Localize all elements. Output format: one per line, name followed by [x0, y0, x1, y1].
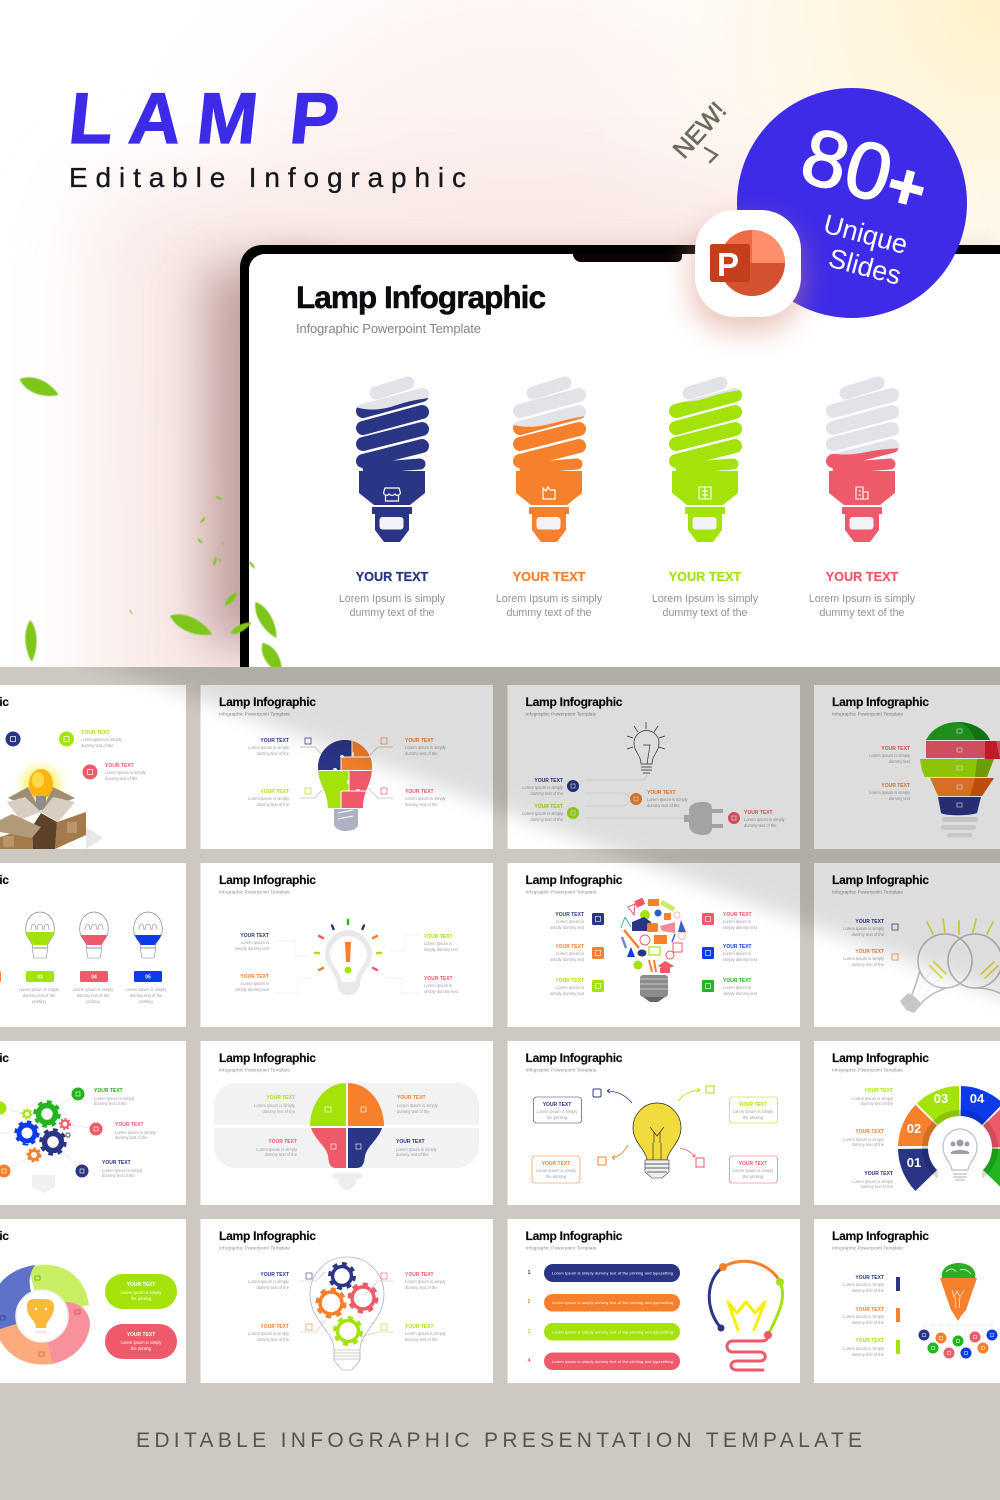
bulb 2 text: YOUR TEXT: [513, 570, 585, 584]
bulb 2: orange: [516, 383, 582, 542]
text block orange: Lorem Ipsum is simply: [843, 1314, 885, 1319]
text block red: Lorem Ipsum is simply: [744, 817, 786, 822]
text block red: YOUR TEXT: [744, 810, 773, 816]
text block orange: dummy text of the: [256, 1337, 290, 1342]
text block lime: YOUR TEXT: [405, 1324, 434, 1330]
icon circles: [0, 1088, 102, 1178]
connectors: [275, 935, 420, 993]
text block navy: Lorem Ipsum is simply: [843, 1282, 885, 1287]
text block lime: YOUR TEXT: [81, 730, 110, 736]
text block red: simply dummy text: [424, 989, 459, 994]
falling green leaves: [17, 372, 287, 677]
chart: sliced bulb: [920, 722, 1000, 838]
text block orange: Lorem Ipsum is simply: [869, 790, 911, 795]
text block orange: Lorem Ipsum is simply: [405, 745, 447, 750]
text block lime: Lorem Ipsum is simply: [852, 1096, 894, 1101]
text block red: Lorem Ipsum is simply: [405, 796, 447, 801]
slide r3c3: sketched yellow bulb: [508, 1041, 800, 1205]
text block orange: Lorem Ipsum is simply: [647, 797, 689, 802]
badge: 80+ Unique Slides: 80+: [793, 110, 938, 229]
text block orange: dummy text of the: [647, 803, 680, 808]
text block lime: simply dummy text: [424, 947, 459, 952]
text block lime: Lorem Ipsum is simply: [522, 811, 564, 816]
bulb 2 text: Lorem Ipsum is simply: [496, 593, 603, 605]
bulb 2 text: dummy text of the: [507, 607, 592, 619]
icon cluster: [918, 1325, 998, 1358]
row 3: Lorem Ipsum is simply dummy text of the printing and typesetting: [552, 1330, 673, 1334]
text block red: YOUR TEXT: [424, 976, 453, 982]
slide r1c4: stacked bulb: Lamp Infographic: [832, 695, 929, 709]
text block orange: simply dummy text: [235, 987, 270, 992]
text box red: the printing: [743, 1174, 764, 1179]
icon: PowerPoint app: P: [717, 246, 739, 283]
icon: lime circle: [59, 732, 74, 746]
text block red: YOUR TEXT: [268, 1139, 297, 1145]
icon: red circle: [82, 764, 98, 780]
text block orange: Lorem Ipsum is simply: [397, 1103, 439, 1108]
text block 03: dummy text of the: [23, 993, 56, 998]
slide r1c4: stacked bulb: Infographic Powerpoint Template: [832, 712, 903, 716]
slide r4c4: funnel bulb: Lamp Infographic: [832, 1229, 929, 1243]
text block blue: simply dummy text: [723, 957, 758, 962]
slide r4c2: gears in bulb: Lamp Infographic: [219, 1229, 316, 1243]
text block navy: dummy text of the: [530, 791, 564, 796]
text block navy: Lorem Ipsum is simply: [248, 745, 290, 750]
text block red: YOUR TEXT: [723, 912, 752, 918]
illustration: box with glowing bulb: [0, 756, 103, 849]
text block red: Lorem Ipsum is: [723, 919, 751, 924]
diagonal light shadow over gallery: [98, 667, 1000, 1002]
text block red: dummy text of the: [744, 823, 777, 828]
text block lime: YOUR TEXT: [864, 1088, 893, 1094]
text block orange: YOUR TEXT: [855, 1307, 884, 1313]
text block red: YOUR TEXT: [881, 746, 910, 752]
gears: [317, 1264, 377, 1344]
text block red: Lorem Ipsum is simply: [105, 770, 147, 775]
text block lime: YOUR TEXT: [855, 1338, 884, 1344]
text block red: dummy text of the: [105, 776, 138, 781]
text block navy: Lorem Ipsum is simply: [102, 1168, 144, 1173]
icon: sketched bulb: [627, 722, 665, 773]
text block red: YOUR TEXT: [115, 1122, 144, 1128]
faint base bulb: [32, 1175, 55, 1193]
text block navy: YOUR TEXT: [855, 919, 884, 925]
illustration: twin bulbs: [900, 919, 1000, 1013]
text block orange: dummy text of the: [851, 962, 885, 967]
text block lime: Lorem Ipsum is: [424, 941, 452, 946]
icon: funnel bulb: [940, 1263, 977, 1321]
text block orange: YOUR TEXT: [881, 783, 910, 789]
pill red: YOUR TEXT: [127, 1332, 155, 1338]
pill lime: the printing: [131, 1296, 152, 1301]
text block lime: Lorem Ipsum is simply: [843, 1346, 885, 1351]
text block red: Lorem Ipsum is simply: [869, 753, 911, 758]
icon: shop: [384, 488, 400, 501]
slide r2c2: exclamation bulb: Lamp Infographic: [219, 873, 316, 887]
text block navy: Lorem Ipsum is: [556, 919, 584, 924]
slide r4c4: funnel bulb: Infographic Powerpoint Template: [832, 1246, 903, 1250]
bulb outline: [310, 1257, 384, 1370]
text block green: YOUR TEXT: [723, 978, 752, 984]
slide r2c4: overlapping bulbs: Infographic Powerpoint Template: [832, 890, 903, 894]
text box lime: the printing: [743, 1115, 764, 1120]
bulb 3 text: YOUR TEXT: [669, 570, 741, 584]
text block 04: printing: [86, 999, 100, 1004]
bulb 4 text: Lorem Ipsum is simply: [809, 593, 916, 605]
text block lime: dummy text of the: [530, 817, 564, 822]
slide r1c3: line bulb and plug: Infographic Powerpoint Template: [526, 712, 597, 716]
segment numbers: 04: [970, 1091, 985, 1106]
slide r2c1: outlined bulbs with tags: [0, 863, 186, 1027]
slide r2c3: education icons bulb: Lamp Infographic: [526, 873, 623, 887]
text block navy: simply dummy text: [550, 925, 585, 930]
text block orange: YOUR TEXT: [240, 974, 269, 980]
row 3: [528, 1323, 680, 1340]
lower gallery band: [0, 667, 1000, 1500]
arrows: [607, 1088, 700, 1160]
text block red: YOUR TEXT: [405, 789, 434, 795]
text block green: Lorem Ipsum is simply: [94, 1096, 136, 1101]
text block red: Lorem Ipsum is simply: [256, 1147, 298, 1152]
bulb 3 text: dummy text of the: [663, 607, 748, 619]
bulb 3 text: Lorem Ipsum is simply: [652, 593, 759, 605]
text block orange: YOUR TEXT: [855, 1129, 884, 1135]
text box navy: YOUR TEXT: [543, 1102, 571, 1108]
segment numbers: 03: [934, 1091, 948, 1106]
text block orange: dummy text of the: [851, 1142, 885, 1147]
pill red: Lorem Ipsum is simply: [121, 1340, 162, 1345]
illustration: bulb made of icons: [621, 898, 686, 1002]
slide r1c2: puzzle bulb: [200, 685, 493, 849]
text block navy: dummy text of the: [860, 1184, 894, 1189]
slide r1c1: opened box: [0, 685, 186, 849]
text block blue: Lorem Ipsum is: [723, 951, 751, 956]
text block lime: Lorem Ipsum is simply: [248, 796, 290, 801]
text block navy: Lorem Ipsum is simply: [248, 1279, 290, 1284]
icon: navy circle: [6, 732, 20, 746]
text block orange: Lorem Ipsum is: [241, 981, 269, 986]
connectors: [0, 1094, 96, 1171]
grey panels: [214, 1083, 479, 1168]
tag 04: [80, 971, 108, 982]
text block lime: dummy text of the: [81, 743, 114, 748]
text block navy: Lorem Ipsum is: [241, 940, 269, 945]
text block green: YOUR TEXT: [94, 1088, 123, 1094]
text block orange: YOUR TEXT: [405, 738, 434, 744]
text block lime: YOUR TEXT: [555, 978, 584, 984]
icon squares: [592, 913, 714, 992]
bulb lime: [26, 912, 54, 958]
tag 04: 04: [91, 974, 97, 980]
small icons: [892, 924, 898, 960]
bulb 3: lime: [672, 383, 738, 542]
bulb 1 text: YOUR TEXT: [356, 570, 428, 584]
slide r3c2: four quadrant bulb: [200, 1041, 493, 1205]
text block navy: YOUR TEXT: [555, 912, 584, 918]
text block red: dummy text of the: [405, 802, 438, 807]
text block 04: Lorem Ipsum is simply: [73, 987, 113, 992]
text block lime: YOUR TEXT: [266, 1095, 295, 1101]
row 1: [528, 1264, 680, 1282]
bulb 1: navy: [359, 383, 425, 542]
slide r4c1: donut: [0, 1219, 186, 1383]
tablet mockup: [240, 245, 1000, 667]
slide r3c3: sketched yellow bulb: Infographic Powerpoint Template: [526, 1068, 597, 1072]
text box orange: YOUR TEXT: [542, 1161, 570, 1167]
slide r4c3: pills and line bulb: [508, 1219, 800, 1383]
slide r3c1: gears: [0, 1041, 186, 1205]
bulb 4: red: [829, 383, 895, 542]
text block 03: printing: [32, 999, 46, 1004]
text block lime: dummy text of the: [851, 1352, 885, 1357]
text block lime: YOUR TEXT: [260, 789, 289, 795]
text block lime: Lorem Ipsum is simply: [254, 1103, 296, 1108]
text box navy: the printing: [547, 1115, 568, 1120]
text box lime: YOUR TEXT: [739, 1102, 767, 1108]
row 2: [528, 1294, 680, 1312]
text block orange: Lorem Ipsum is: [556, 951, 584, 956]
text box lime: [730, 1097, 778, 1123]
slide r3c3: sketched yellow bulb: Lamp Infographic: [526, 1051, 623, 1065]
text block navy: YOUR TEXT: [260, 738, 289, 744]
text block red: dummy text of the: [264, 1152, 298, 1157]
tag 03: [26, 971, 54, 982]
slide r4c3: pills and line bulb: Infographic Powerpoint Template: [526, 1246, 597, 1250]
bulb 1 text: dummy text of the: [350, 607, 435, 619]
colour bars: [896, 1277, 900, 1354]
text block navy: dummy text of the: [851, 932, 885, 937]
text block orange: dummy text of the: [405, 751, 438, 756]
slide r2c2: exclamation bulb: [200, 863, 493, 1027]
slide r1c3: line bulb and plug: [508, 685, 800, 849]
connectors and icons: [300, 1272, 393, 1337]
text block lime: dummy text of the: [860, 1101, 894, 1106]
slide r1c2: puzzle bulb: Lamp Infographic: [219, 695, 316, 709]
row 4: [528, 1352, 680, 1370]
chart: donut: [0, 1265, 90, 1365]
bulb red: [80, 912, 108, 958]
text block lime: dummy text of the: [256, 802, 290, 807]
chart: quadrant bulb: [310, 1083, 384, 1190]
text block orange: Lorem Ipsum is simply: [843, 956, 885, 961]
text block red: YOUR TEXT: [105, 763, 134, 769]
row 3: 3: [528, 1329, 531, 1335]
outline icons: [593, 1086, 714, 1167]
text block red: simply dummy text: [723, 925, 758, 930]
slide r2c4: overlapping bulbs: Lamp Infographic: [832, 873, 929, 887]
text block orange: YOUR TEXT: [555, 944, 584, 950]
badge: 80+ Unique Slides: Unique: [820, 209, 911, 260]
icon: team bulb: [943, 1129, 977, 1180]
slide r1c4: stacked bulb: [814, 685, 1000, 849]
text block blue: YOUR TEXT: [723, 944, 752, 950]
segment numbers: 02: [907, 1121, 921, 1136]
text block navy: Lorem Ipsum is simply: [843, 926, 885, 931]
text block orange: Lorem Ipsum is simply: [248, 1331, 290, 1336]
tablet drop shadow: [70, 176, 999, 667]
gears cluster: [16, 1102, 70, 1162]
tag 05: 05: [145, 974, 151, 980]
slide r2c3: education icons bulb: [508, 863, 800, 1027]
text block navy: YOUR TEXT: [102, 1160, 131, 1166]
text block navy: dummy text of the: [396, 1152, 429, 1157]
icon: PowerPoint app: [690, 210, 802, 332]
text block navy: simply dummy text: [235, 946, 270, 951]
main title: LAMP: LAMP: [65, 79, 343, 159]
text block orange: YOUR TEXT: [397, 1095, 426, 1101]
text block lime: dummy text of the: [405, 1337, 438, 1342]
text box red: YOUR TEXT: [739, 1161, 767, 1167]
icon: alert bulb: [315, 920, 381, 995]
text block 05: printing: [139, 999, 153, 1004]
chart: wheel segments: [898, 1086, 1000, 1198]
text block navy: YOUR TEXT: [396, 1139, 425, 1145]
slide r2c3: education icons bulb: Infographic Powerpoint Template: [526, 890, 597, 894]
text box red: [730, 1156, 778, 1183]
text block orange: YOUR TEXT: [260, 1324, 289, 1330]
slide r2c4: overlapping bulbs: [814, 863, 1000, 1027]
text block navy: YOUR TEXT: [855, 1275, 884, 1281]
text block 04: dummy text of the: [77, 993, 110, 998]
slide subheading: Infographic Powerpoint Template: [296, 321, 481, 336]
slide heading: Lamp Infographic: Lamp Infographic: [296, 279, 546, 315]
text box red: Lorem Ipsum is simply: [733, 1168, 774, 1173]
row 2: Lorem Ipsum is simply dummy text of the printing and typesetting: [552, 1300, 673, 1305]
text block orange: dummy text: [889, 796, 911, 801]
text block navy: Lorem Ipsum is simply: [396, 1147, 438, 1152]
text block green: Lorem Ipsum is: [723, 985, 751, 990]
pill red: the printing: [131, 1346, 152, 1351]
icon: building: [699, 487, 711, 499]
text block orange: Lorem Ipsum is simply: [843, 1137, 885, 1142]
text block navy: dummy text of the: [256, 1285, 290, 1290]
text block red: Lorem Ipsum is simply: [115, 1130, 157, 1135]
text block red: dummy text of the: [405, 1285, 438, 1290]
text box orange: Lorem Ipsum is simply: [536, 1168, 577, 1173]
bulb 4 text: dummy text of the: [820, 607, 905, 619]
text block navy: YOUR TEXT: [260, 1272, 289, 1278]
slide r3c4: numbered half wheel: Lamp Infographic: [832, 1051, 929, 1065]
subtitle: Editable Infographic: [69, 162, 466, 193]
slide r4c4: funnel bulb: [814, 1219, 1000, 1383]
slide r2c2: exclamation bulb: Infographic Powerpoint Template: [219, 890, 290, 894]
slide r4c3: pills and line bulb: Lamp Infographic: [526, 1229, 623, 1243]
row 1: 1: [528, 1270, 531, 1276]
row 2: 2: [528, 1299, 531, 1305]
pill lime: [105, 1274, 177, 1309]
chart: jigsaw bulb: [300, 738, 393, 831]
pill lime: YOUR TEXT: [127, 1282, 155, 1288]
text block red: dummy text: [889, 759, 911, 764]
icon: offices: [856, 487, 868, 499]
slide r1c2: puzzle bulb: Infographic Powerpoint Template: [219, 712, 290, 716]
slide r4c2: gears in bulb: [200, 1219, 493, 1383]
bulb 4 text: YOUR TEXT: [826, 570, 898, 584]
badge: 80+ Unique Slides: Slides: [825, 243, 904, 291]
text block navy: YOUR TEXT: [534, 778, 563, 784]
slide r3c2: four quadrant bulb: Infographic Powerpoint Template: [219, 1068, 290, 1072]
text block 05: dummy text of the: [130, 993, 163, 998]
text block red: dummy text of the: [115, 1135, 148, 1140]
bulb 1 text: Lorem Ipsum is simply: [339, 593, 446, 605]
text block lime: simply dummy text: [550, 991, 585, 996]
text block red: YOUR TEXT: [405, 1272, 434, 1278]
icon: box: [543, 487, 555, 499]
slide r4c2: gears in bulb: Infographic Powerpoint Template: [219, 1246, 290, 1250]
icon dots: [567, 780, 740, 824]
slide r3c4: numbered half wheel: Infographic Powerpoint Template: [832, 1068, 903, 1072]
row 1: Lorem Ipsum is simply dummy text of the printing and typesetting: [552, 1270, 673, 1276]
text block green: dummy text of the: [94, 1101, 127, 1106]
text block lime: YOUR TEXT: [534, 804, 563, 810]
text block navy: Lorem Ipsum is simply: [852, 1179, 894, 1184]
text box navy: [534, 1097, 582, 1123]
text block lime: Lorem Ipsum is simply: [405, 1331, 447, 1336]
text block navy: Lorem Ipsum is simply: [522, 785, 564, 790]
text box orange: [532, 1156, 580, 1183]
text block 05: Lorem Ipsum is simply: [126, 987, 166, 992]
illustration: yellow bulb: [633, 1103, 681, 1178]
text block lime: YOUR TEXT: [424, 934, 453, 940]
slide r3c4: numbered half wheel: [814, 1041, 1000, 1205]
text block lime: Lorem Ipsum is simply: [81, 737, 123, 742]
text block lime: Lorem Ipsum is: [556, 985, 584, 990]
text block 03: Lorem Ipsum is simply: [19, 987, 59, 992]
badge: 80+ Unique Slides: [737, 88, 967, 318]
text block navy: dummy text of the: [851, 1288, 885, 1293]
segment numbers: [907, 1091, 985, 1170]
text block navy: dummy text of the: [256, 751, 290, 756]
text block red: Lorem Ipsum is simply: [405, 1279, 447, 1284]
base lines: [334, 1350, 360, 1359]
text block navy: YOUR TEXT: [240, 933, 269, 939]
text block navy: dummy text of the: [102, 1173, 135, 1178]
pill red: [105, 1324, 177, 1359]
text block green: simply dummy text: [723, 991, 758, 996]
text block orange: dummy text of the: [397, 1109, 430, 1114]
text block orange: YOUR TEXT: [647, 790, 676, 796]
footer caption: EDITABLE INFOGRAPHIC PRESENTATION TEMPALATE: [136, 1429, 862, 1452]
text block orange: simply dummy text: [550, 957, 585, 962]
text box navy: Lorem Ipsum is simply: [537, 1109, 578, 1114]
NEW! handwritten note: NEW!: [668, 97, 732, 164]
text block red: Lorem Ipsum is: [424, 983, 452, 988]
pill lime: Lorem Ipsum is simply: [121, 1290, 162, 1295]
illustration: segmented line bulb: [709, 1261, 784, 1370]
row 4: Lorem Ipsum is simply dummy text of the printing and typesetting: [552, 1359, 673, 1364]
segment numbers: 01: [907, 1155, 921, 1170]
tag 03: 03: [37, 974, 43, 980]
text box orange: the printing: [546, 1174, 567, 1179]
tag 05: [134, 971, 162, 982]
slide r1c3: line bulb and plug: Lamp Infographic: [526, 695, 623, 709]
connector lines: [585, 774, 684, 818]
text block navy: YOUR TEXT: [864, 1171, 893, 1177]
row 4: 4: [528, 1358, 531, 1364]
bulb blue: [134, 912, 162, 958]
text block orange: dummy text of the: [851, 1320, 885, 1325]
icon: plug: [684, 802, 723, 835]
text box lime: Lorem Ipsum is simply: [733, 1109, 774, 1114]
text block orange: YOUR TEXT: [855, 949, 884, 955]
text block lime: dummy text of the: [262, 1109, 296, 1114]
slide r3c2: four quadrant bulb: Lamp Infographic: [219, 1051, 316, 1065]
